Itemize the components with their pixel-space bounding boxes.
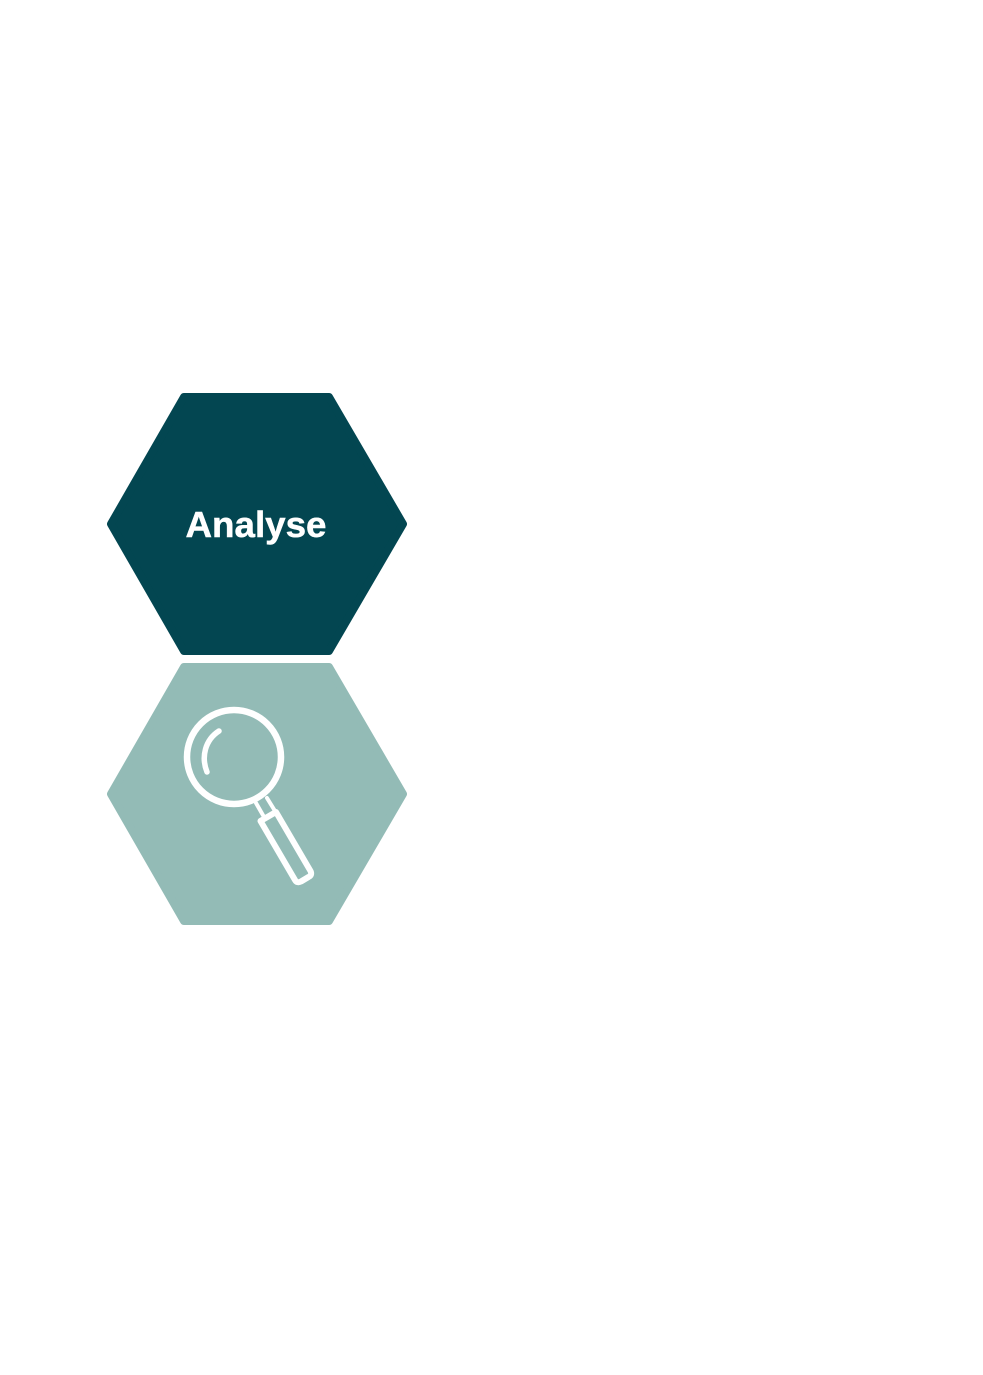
icon: magnifying glass	[187, 710, 311, 882]
hexagon: magnifying glass panel	[111, 667, 403, 921]
hexagon: Analyse heading	[111, 397, 403, 651]
title: Analyse: Analyse	[186, 504, 326, 545]
